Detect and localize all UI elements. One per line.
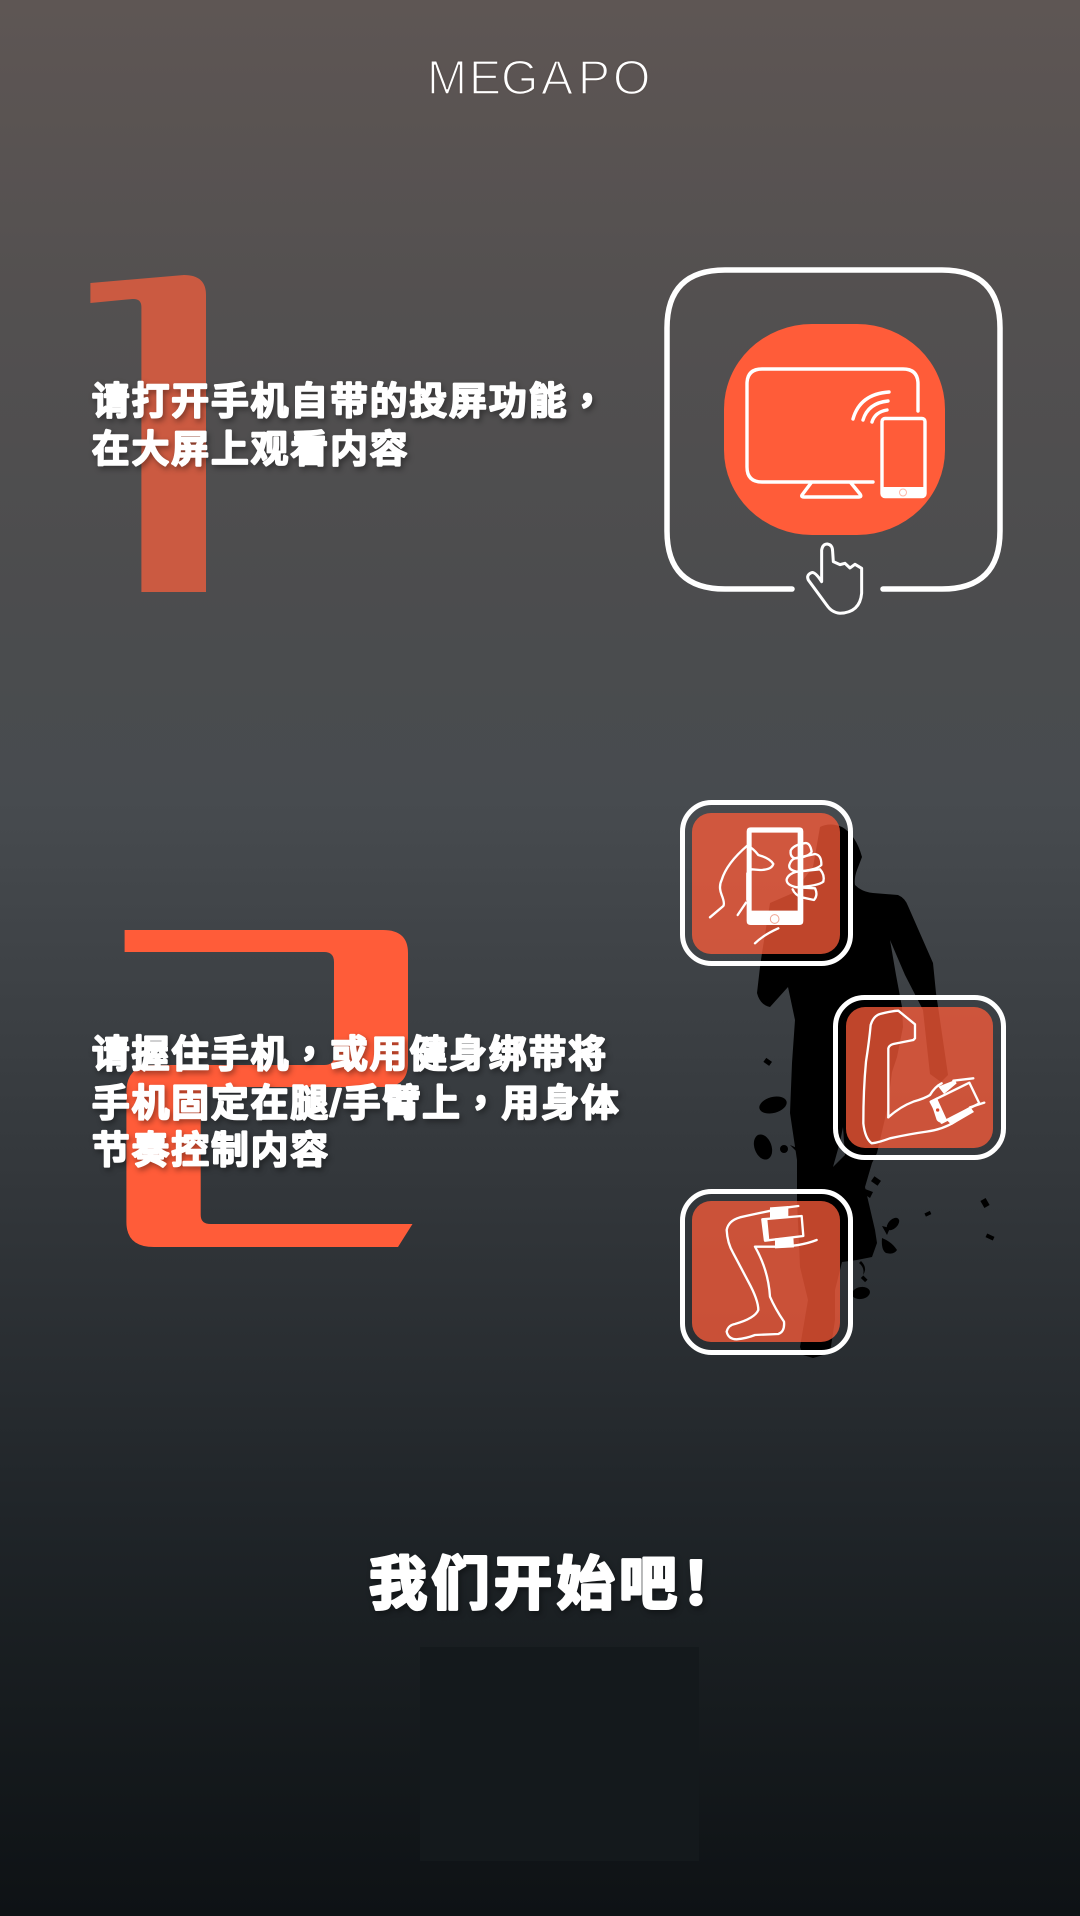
runner silhouette with splatter [751,824,994,1358]
step 2 instruction text: 手机固定在腿/手臂上，用身体 [92,1072,621,1127]
logo: MEGAPO: MEGAPO [427,52,650,105]
step 2 instruction text: 节奏控制内容 [92,1129,330,1171]
dark empty panel [420,1647,699,1861]
orange rounded blob [724,324,945,535]
panel: screen casting icon [667,270,1000,613]
icon: flexed arm with phone band [863,1011,984,1143]
icon: leg with phone band [727,1206,817,1339]
step 2 instruction text: 请握住手机，或用健身绑带将 [92,1023,608,1078]
panel: phone on leg tile [682,1192,850,1352]
step 1 instruction text: 在大屏上观看内容 [92,428,410,470]
rounded frame with gap [667,270,1000,589]
panel: hand holding phone tile [682,802,850,964]
icon: pointing hand [808,544,862,613]
big numeral 1 [90,275,206,592]
panel: phone on arm tile [836,998,1004,1158]
closing heading: 我们开始吧！ [369,1552,744,1617]
icon: hand and phone [710,827,824,943]
icon: TV with phone [747,369,925,497]
big numeral 2 [125,930,412,1247]
step 1 instruction text: 请打开手机自带的投屏功能， [92,370,608,425]
